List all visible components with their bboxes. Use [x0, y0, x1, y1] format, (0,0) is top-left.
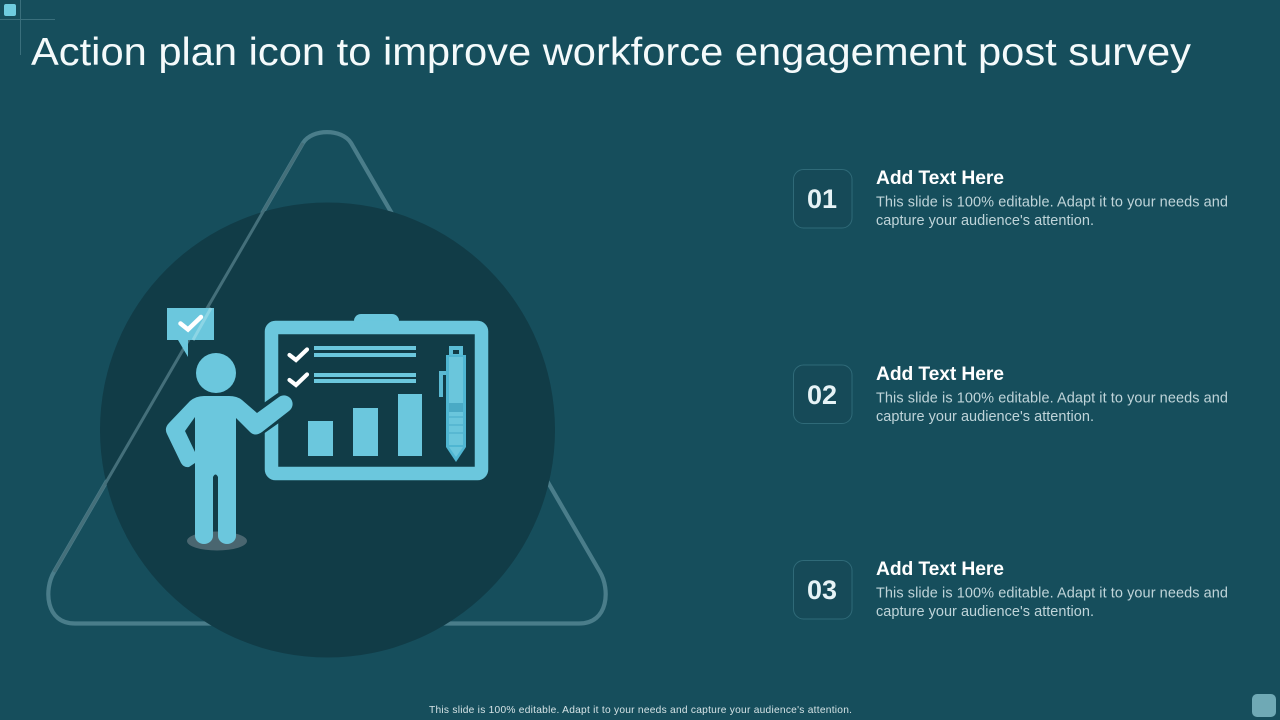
- item 02: [794, 364, 1228, 425]
- bar chart: [308, 394, 422, 456]
- icon: speech bubble with check: [167, 308, 214, 357]
- body text 02: [876, 390, 1228, 425]
- body text 01: [876, 194, 1228, 229]
- dark circle: [100, 202, 555, 658]
- corner button: [1252, 694, 1276, 717]
- icon: checklist: [290, 346, 416, 385]
- triangle edge over circle: [54, 143, 303, 572]
- number badge 02: 02: [807, 380, 837, 410]
- heading 02: Add Text Here: [876, 364, 1004, 385]
- body text 02: capture your audience's attention.: [876, 409, 1094, 425]
- icon: presenter with board: [166, 308, 482, 550]
- number badge 02: [794, 365, 852, 424]
- number badge 01: 01: [807, 184, 837, 214]
- heading 01: Add Text Here: [876, 168, 1004, 189]
- number badge 03: [794, 560, 852, 619]
- title: Action plan icon to improve workforce engagement post survey: [31, 31, 1192, 74]
- body text 01: This slide is 100% editable. Adapt it to your needs and: [876, 194, 1228, 210]
- body text 03: This slide is 100% editable. Adapt it to your needs and: [876, 586, 1228, 602]
- icon: pen: [439, 348, 466, 462]
- icon: clipboard board: [272, 314, 482, 474]
- icon: person: [166, 353, 293, 544]
- number badge 01: [794, 170, 852, 228]
- item 01: [794, 168, 1228, 229]
- body text 01: capture your audience's attention.: [876, 213, 1094, 229]
- heading 03: Add Text Here: [876, 559, 1004, 580]
- corner accent: [0, 0, 55, 55]
- footer note: This slide is 100% editable. Adapt it to your needs and capture your audience's attention.: [429, 705, 852, 716]
- body text 03: capture your audience's attention.: [876, 604, 1094, 620]
- body text 03: [876, 586, 1228, 620]
- icon: floor shadow: [187, 532, 247, 550]
- item 03: [794, 559, 1228, 620]
- body text 02: This slide is 100% editable. Adapt it to your needs and: [876, 390, 1228, 406]
- triangle outline: [48, 132, 606, 624]
- number badge 03: 03: [807, 575, 837, 605]
